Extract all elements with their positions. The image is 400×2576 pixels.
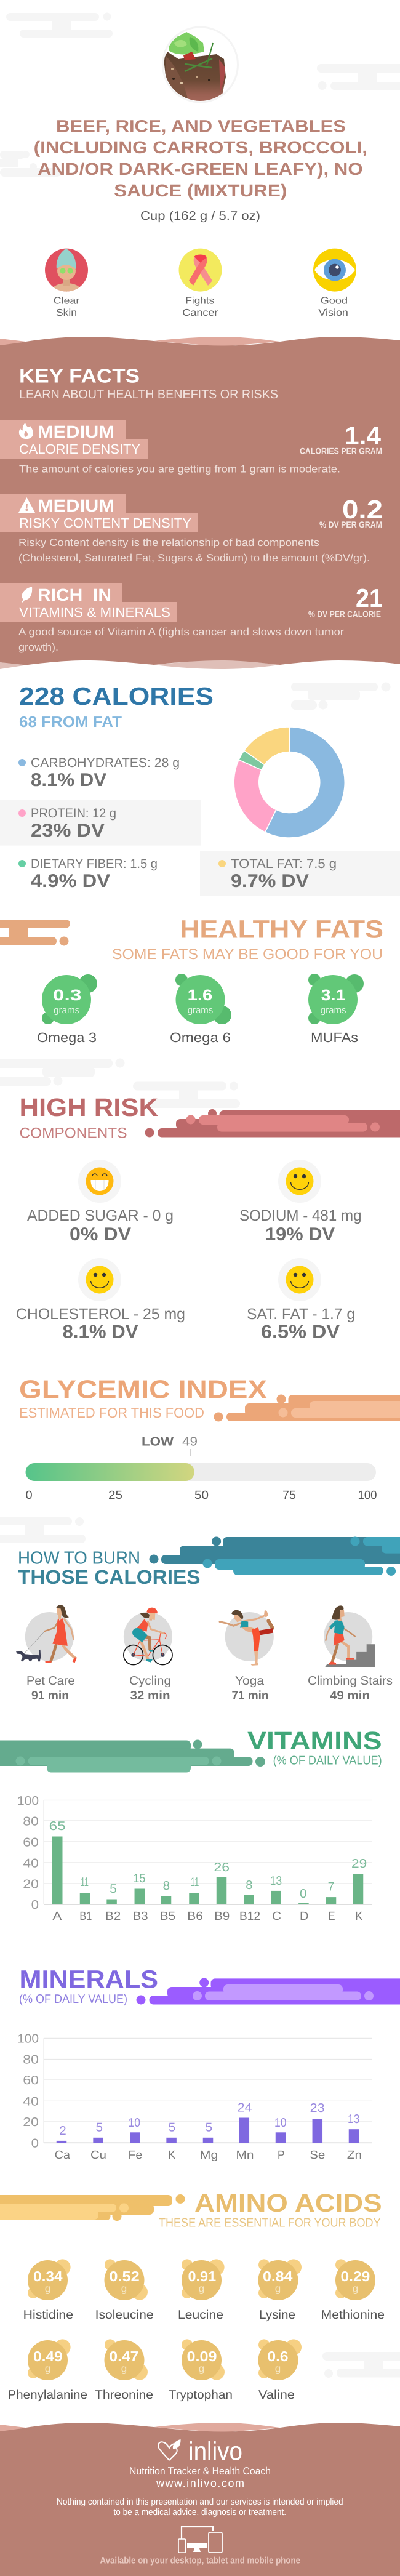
logo: inlivo: [158, 2436, 242, 2466]
bar chart: vitamins: B5: [160, 1910, 175, 1923]
website: www.inlivo.com: [156, 2477, 244, 2489]
fact: calorie density: MEDIUM: [38, 422, 114, 441]
activity: pet care: 91 min: [31, 1689, 69, 1703]
bar chart: minerals: Zn: [347, 2149, 362, 2162]
bar chart: vitamins: 26: [214, 1861, 230, 1874]
amino: phenylalanine: g: [45, 2362, 50, 2375]
subheading: 68 from fat: 68 FROM FAT: [19, 714, 122, 731]
bar chart: vitamins: 100: [17, 1794, 39, 1808]
icon: woman with towel: [45, 249, 88, 292]
decorative band: glycemic index: [214, 1395, 400, 1422]
amino: lysine: 0.84: [263, 2268, 293, 2284]
legend: total fat: TOTAL FAT: 7.5 g: [231, 857, 337, 871]
risk: added sugar: [27, 1160, 174, 1245]
bar chart: minerals: Mg: [200, 2149, 218, 2162]
bar chart: minerals: Ca: [55, 2149, 70, 2162]
glycemic index gauge: 75: [282, 1489, 296, 1502]
benefit: fights cancer: Fights: [185, 296, 214, 307]
logo: inlivo: inlivo: [188, 2436, 242, 2466]
activity: climbing stairs: 49 min: [330, 1689, 370, 1703]
bar chart: vitamins: [17, 1794, 372, 1923]
amino: isoleucine: Isoleucine: [95, 2308, 154, 2322]
fact: risky content density: 0.2: [342, 495, 383, 524]
bar chart: vitamins: 8: [162, 1879, 170, 1893]
bar chart: vitamins: B12: [239, 1910, 260, 1923]
amino: tryptophan: Tryptophan: [169, 2388, 233, 2402]
title: BEEF, RICE, AND VEGETABLES: [56, 116, 346, 135]
bar chart: vitamins: 0: [31, 1898, 39, 1912]
bar chart: vitamins: B6: [187, 1910, 203, 1923]
fact: risky content density: % DV PER GRAM: [319, 520, 382, 529]
icon: warning triangle: [18, 497, 35, 513]
bar chart: minerals: Cu: [90, 2149, 106, 2162]
benefit: fights cancer: Cancer: [182, 308, 218, 318]
bar chart: minerals: 13: [348, 2113, 359, 2126]
activity: cycling: Cycling: [129, 1674, 171, 1688]
activity: yoga: Yoga: [235, 1674, 265, 1688]
fat: omega 3: Omega 3: [37, 1030, 97, 1045]
glycemic index gauge: [26, 1435, 377, 1502]
amino: phenylalanine: Phenylalanine: [7, 2388, 87, 2402]
icon: woman walking dog: [16, 1605, 77, 1663]
decorative band: vitamins: [0, 1739, 265, 1773]
amino: leucine: g: [199, 2283, 204, 2295]
fact: rich in vitamins and minerals: % DV PER CALORIE: [308, 609, 381, 619]
legend: dietary fiber: [18, 857, 158, 891]
fact: rich in vitamins and minerals: VITAMINS & MINERALS: [19, 604, 170, 620]
fat: MUFAs: grams: [321, 1005, 346, 1016]
bar chart: vitamins: 13: [270, 1874, 282, 1888]
glycemic index gauge: 25: [108, 1489, 122, 1502]
bar chart: minerals: K: [168, 2149, 176, 2162]
bar chart: minerals: 100: [17, 2032, 39, 2046]
bar chart: vitamins: 80: [23, 1815, 39, 1828]
benefit: good vision: Good: [321, 296, 348, 307]
benefit: fights cancer: [178, 249, 222, 318]
glycemic index gauge: 0: [26, 1489, 33, 1502]
legend: protein: [0, 800, 201, 846]
legend: carbohydrates: 8.1% DV: [31, 770, 106, 790]
amino: threonine: [95, 2339, 153, 2402]
bar chart: vitamins: 20: [23, 1877, 39, 1891]
activity: pet care: [16, 1605, 77, 1703]
fat: omega 6: Omega 6: [170, 1030, 231, 1045]
glycemic index gauge: 49: [182, 1435, 198, 1449]
decorative band: amino acids: [0, 2194, 185, 2221]
amino: threonine: Threonine: [95, 2388, 153, 2402]
amino: histidine: g: [45, 2283, 50, 2295]
bar chart: minerals: 80: [23, 2053, 39, 2067]
subheading: estimated: ESTIMATED FOR THIS FOOD: [19, 1405, 204, 1421]
icon: woman climbing stairs: [324, 1605, 375, 1667]
serving size: Cup (162 g / 5.7 oz): [140, 209, 260, 223]
bar chart: vitamins: A: [52, 1910, 62, 1923]
fat: omega 6: 1.6: [188, 987, 212, 1004]
heading: how to burn those calories: THOSE CALORIES: [18, 1566, 201, 1588]
amino: valine: g: [275, 2362, 281, 2375]
subheading: minerals: (% OF DAILY VALUE): [19, 1992, 127, 2006]
disclaimer: [57, 2497, 343, 2518]
bar chart: vitamins: K: [355, 1910, 363, 1923]
bar chart: vitamins: 11: [81, 1876, 89, 1889]
amino: lysine: [258, 2259, 302, 2322]
bar chart: minerals: 10: [128, 2116, 140, 2130]
amino: lysine: Lysine: [259, 2308, 295, 2322]
bar chart: minerals: Fe: [128, 2149, 142, 2162]
risk: added sugar: 0% DV: [70, 1224, 131, 1245]
legend: dietary fiber: DIETARY FIBER: 1.5 g: [31, 857, 158, 871]
amino: methionine: 0.29: [341, 2268, 370, 2284]
bar chart: vitamins: 5: [110, 1882, 117, 1896]
bar chart: vitamins: C: [272, 1910, 281, 1923]
amino: methionine: [321, 2259, 385, 2322]
subheading: components: COMPONENTS: [20, 1125, 127, 1142]
bar chart: vitamins: 8: [246, 1879, 252, 1892]
legend: protein: PROTEIN: 12 g: [31, 806, 116, 821]
risk: saturated fat: [247, 1258, 355, 1342]
heading: key facts: KEY FACTS: [19, 364, 140, 387]
bar chart: vitamins: B1: [79, 1910, 92, 1923]
benefit: good vision: [313, 249, 356, 318]
amino: histidine: 0.34: [33, 2268, 63, 2284]
title: [34, 116, 367, 200]
bar chart: vitamins: B9: [214, 1910, 230, 1923]
bar chart: minerals: P: [278, 2149, 285, 2162]
risk: sodium: SODIUM - 481 mg: [239, 1207, 362, 1224]
bar chart: vitamins: B2: [105, 1910, 121, 1923]
bar chart: vitamins: 15: [133, 1872, 145, 1885]
icon: cyclist: [124, 1608, 172, 1665]
fact: rich in vitamins and minerals: growth).: [18, 641, 58, 653]
fact: calorie density: CALORIE DENSITY: [19, 441, 140, 457]
fact: rich in vitamins and minerals: RICH IN: [38, 585, 111, 604]
benefit: good vision: Vision: [318, 308, 348, 318]
risk: cholesterol: 8.1% DV: [63, 1322, 138, 1342]
bar chart: minerals: 60: [23, 2074, 39, 2087]
icon: flame: [19, 423, 33, 439]
fact: rich in vitamins and minerals: A good source of Vitamin A (fights cancer and slows down tumor: [18, 626, 344, 638]
amino: methionine: Methionine: [321, 2308, 385, 2322]
amino: tryptophan: [169, 2339, 233, 2402]
bar chart: minerals: 20: [23, 2116, 39, 2129]
legend: dietary fiber: 4.9% DV: [31, 871, 110, 891]
heading: how to burn those calories: HOW TO BURN: [18, 1549, 140, 1568]
activity: climbing stairs: [308, 1605, 393, 1703]
benefit: clear skin: Clear: [54, 296, 80, 307]
risk: cholesterol: CHOLESTEROL - 25 mg: [16, 1306, 185, 1323]
bar chart: vitamins: E: [328, 1910, 335, 1923]
icon: leaf: [22, 587, 32, 603]
bar chart: minerals: 5: [96, 2121, 103, 2135]
amino: histidine: [23, 2259, 73, 2322]
amino: valine: Valine: [258, 2388, 295, 2402]
amino: leucine: [178, 2259, 225, 2322]
bar chart: vitamins: 60: [23, 1836, 39, 1849]
bar chart: minerals: 0: [31, 2137, 39, 2151]
risk: cholesterol: [16, 1258, 185, 1342]
amino: tryptophan: 0.09: [187, 2348, 217, 2364]
legend: total fat: [200, 851, 400, 896]
legend: carbohydrates: CARBOHYDRATES: 28 g: [31, 756, 180, 770]
bar chart: vitamins: D: [300, 1910, 309, 1923]
bar chart: minerals: 5: [206, 2121, 212, 2135]
activity: yoga: [220, 1610, 274, 1703]
amino: methionine: g: [353, 2283, 358, 2295]
bar chart: vitamins: 11: [191, 1876, 199, 1889]
bar chart: minerals: [17, 2032, 372, 2162]
panel: key facts: [0, 337, 400, 669]
amino: isoleucine: [95, 2259, 154, 2322]
fact: risky content density: MEDIUM: [38, 496, 114, 515]
activity: climbing stairs: Climbing Stairs: [308, 1674, 393, 1688]
availability note: Available on your desktop, tablet and mobile phone: [100, 2556, 300, 2566]
amino: tryptophan: g: [199, 2362, 204, 2375]
risk: saturated fat: 6.5% DV: [261, 1322, 340, 1342]
amino: leucine: Leucine: [178, 2308, 223, 2322]
risk: saturated fat: SAT. FAT - 1.7 g: [247, 1306, 355, 1323]
glycemic index gauge: 100: [358, 1489, 377, 1502]
food photo: beef with greens: [162, 27, 238, 105]
glycemic index gauge: 50: [194, 1489, 209, 1502]
heading: minerals: MINERALS: [20, 1965, 158, 1993]
legend: total fat: 9.7% DV: [231, 871, 309, 891]
amino: phenylalanine: 0.49: [33, 2348, 63, 2364]
amino: leucine: 0.91: [188, 2268, 216, 2284]
amino: threonine: g: [121, 2362, 127, 2375]
fact: calorie density: The amount of calories you are getting from 1 gram is moderate.: [19, 463, 340, 475]
bar chart: minerals: 40: [23, 2095, 39, 2109]
amino: isoleucine: 0.52: [109, 2268, 140, 2284]
subheading: LEARN ABOUT HEALTH BENEFITS OR RISKS: [19, 388, 278, 401]
icon: ribbon: [178, 249, 222, 292]
decorative band: minerals: [137, 1978, 400, 2004]
legend: protein: 23% DV: [31, 821, 105, 841]
bar chart: vitamins: 29: [351, 1857, 367, 1871]
risk: sodium: 19% DV: [265, 1224, 335, 1245]
fact: calorie density: 1.4: [345, 421, 382, 450]
fact: risky content density: [0, 494, 383, 564]
bar chart: minerals: 23: [310, 2101, 325, 2115]
bar chart: vitamins: 40: [23, 1856, 39, 1870]
risk: sodium: [239, 1160, 362, 1245]
fat: omega 3: 0.3: [53, 987, 82, 1004]
bar chart: minerals: Mn: [236, 2149, 254, 2162]
glycemic index gauge: LOW: [142, 1435, 174, 1449]
subheading: amino acids: THESE ARE ESSENTIAL FOR YOUR BODY: [159, 2216, 381, 2229]
disclaimer: Nothing contained in this presentation and our services is intended or implied: [57, 2497, 343, 2507]
legend: carbohydrates: [18, 756, 180, 790]
fact: risky content density: (Cholesterol, Saturated Fat, Sugars & Sodium) to the amount (%DV/gr).: [18, 552, 370, 564]
title: (INCLUDING CARROTS, BROCCOLI,: [34, 138, 367, 157]
fact: calorie density: [0, 420, 382, 475]
subheading: vitamins: (% OF DAILY VALUE): [273, 1754, 382, 1768]
fact: calorie density: CALORIES PER GRAM: [300, 446, 382, 455]
disclaimer: to be a medical advice, diagnosis or treatment.: [113, 2507, 286, 2518]
fat: omega 3: [37, 974, 97, 1045]
fat: omega 3: grams: [54, 1005, 79, 1016]
risk: added sugar: ADDED SUGAR - 0 g: [27, 1207, 174, 1224]
fat: MUFAs: MUFAs: [311, 1030, 358, 1045]
heading: glycemic index: GLYCEMIC INDEX: [19, 1374, 267, 1403]
panel: footer: [0, 2423, 400, 2576]
fat: MUFAs: 3.1: [321, 987, 346, 1004]
decorative band: high risk: [145, 1109, 400, 1138]
title: SAUCE (MIXTURE): [114, 181, 287, 200]
fat: omega 6: [170, 974, 231, 1045]
heading: how to burn those calories: [18, 1549, 201, 1588]
bar chart: minerals: 24: [238, 2101, 252, 2115]
heading: healthy fats: HEALTHY FATS: [180, 915, 383, 944]
bar chart: vitamins: 0: [300, 1887, 307, 1901]
subheading: healthy fats: SOME FATS MAY BE GOOD FOR YOU: [112, 946, 383, 963]
amino: valine: [258, 2339, 302, 2402]
bar chart: minerals: 10: [274, 2116, 287, 2130]
heading: vitamins: VITAMINS: [247, 1727, 382, 1755]
amino: threonine: 0.47: [109, 2348, 138, 2364]
amino: isoleucine: g: [121, 2283, 127, 2295]
heading: 228 calories: 228 CALORIES: [19, 682, 214, 710]
tagline: Nutrition Tracker & Health Coach: [129, 2465, 271, 2477]
bar chart: minerals: 5: [169, 2121, 175, 2135]
amino: lysine: g: [275, 2283, 281, 2295]
activity: yoga: 71 min: [231, 1689, 268, 1703]
title: AND/OR DARK-GREEN LEAFY), NO: [38, 159, 363, 179]
heading: high risk: HIGH RISK: [20, 1093, 158, 1121]
activity: cycling: 32 min: [130, 1689, 170, 1703]
benefit: clear skin: Skin: [56, 308, 77, 318]
bar chart: vitamins: 65: [49, 1820, 66, 1833]
fact: rich in vitamins and minerals: [0, 583, 383, 653]
donut chart: calories breakdown: [234, 727, 345, 838]
decorative band: burn calories: [149, 1536, 400, 1576]
icon: devices: [178, 2527, 222, 2553]
fat: omega 6: grams: [188, 1005, 213, 1016]
fact: risky content density: Risky Content density is the relationship of bad components: [18, 537, 319, 548]
bar chart: minerals: Se: [310, 2149, 325, 2162]
icon: yoga pose: [220, 1610, 274, 1666]
bar chart: vitamins: 7: [328, 1880, 334, 1893]
amino: phenylalanine: [7, 2339, 87, 2402]
icon: eye: [313, 249, 356, 292]
activity: pet care: Pet Care: [26, 1674, 75, 1688]
fact: rich in vitamins and minerals: 21: [356, 584, 383, 612]
heading: amino acids: AMINO ACIDS: [194, 2189, 382, 2217]
amino: valine: 0.6: [267, 2348, 288, 2364]
decorative band: healthy fats: [0, 920, 70, 945]
amino: histidine: Histidine: [23, 2308, 73, 2322]
fact: risky content density: RISKY CONTENT DENSITY: [19, 515, 191, 531]
bar chart: minerals: 2: [59, 2124, 66, 2138]
fat: MUFAs: [308, 974, 364, 1045]
activity: cycling: [124, 1608, 172, 1703]
benefit: clear skin: [45, 249, 88, 318]
bar chart: vitamins: B3: [133, 1910, 148, 1923]
